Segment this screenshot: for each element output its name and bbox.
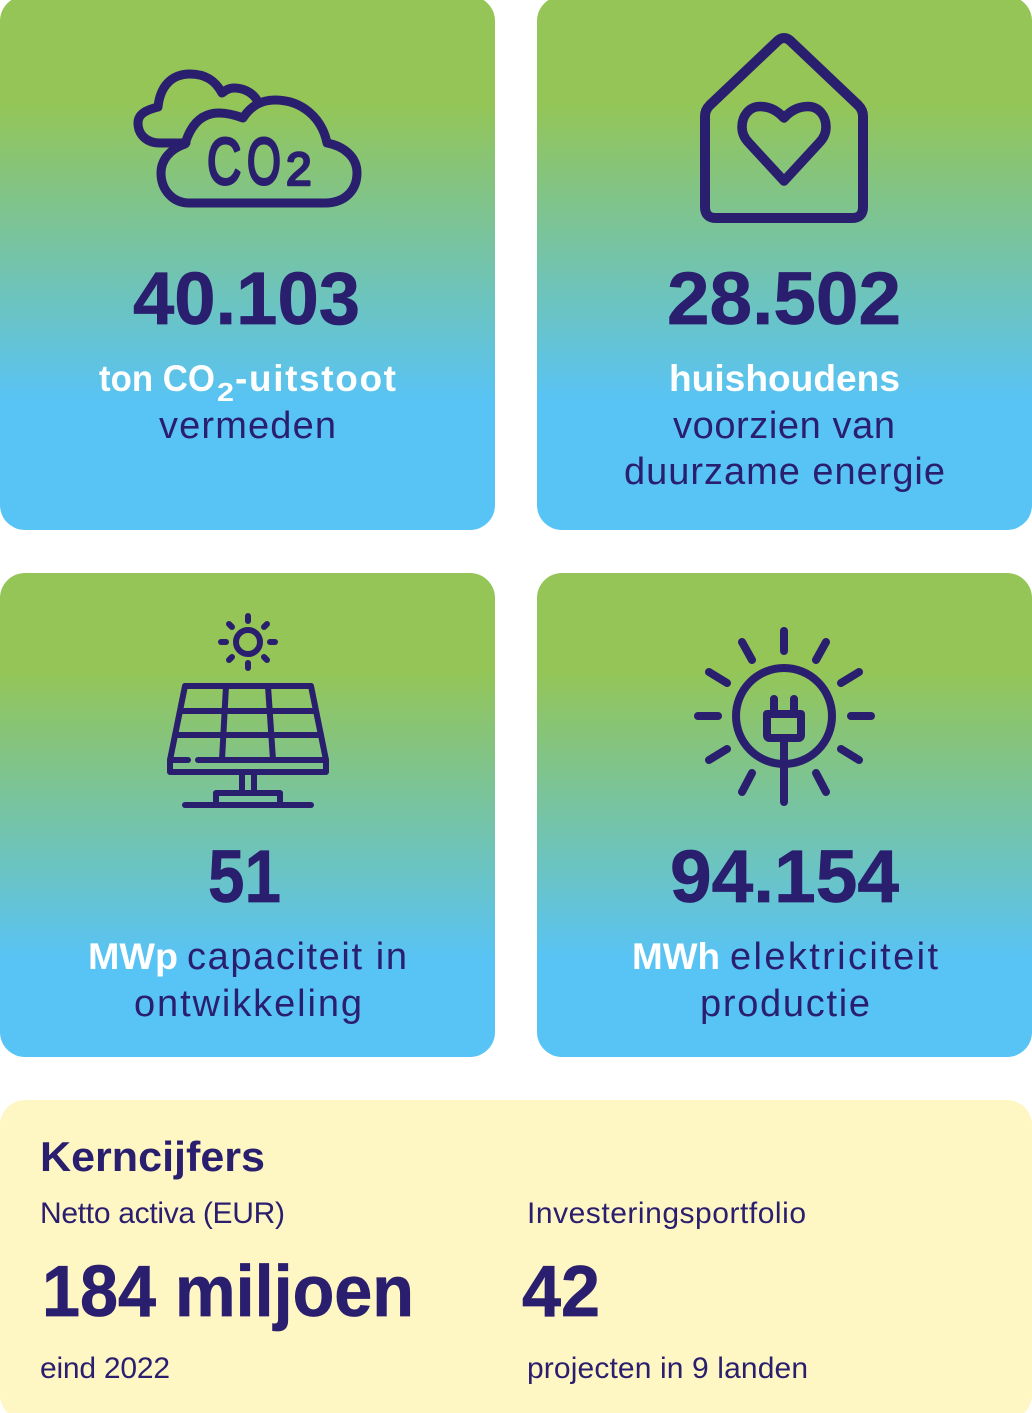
label: MWp capaciteit in ontwikkeling: capaciteit in — [187, 936, 407, 978]
label: MWp capaciteit in ontwikkeling: MWp — [88, 936, 178, 977]
stat: investment portfolio: Investeringsportfolio — [527, 1197, 806, 1230]
label: huishoudens voorzien van duurzame energie: duurzame energie — [624, 451, 945, 493]
icon: CO2 clouds — [138, 74, 357, 203]
label: MWp capaciteit in ontwikkeling: ontwikkeling — [134, 983, 362, 1025]
label: ton CO2-uitstoot vermeden: ton CO — [99, 358, 215, 399]
label: MWp capaciteit in ontwikkeling — [88, 936, 407, 1025]
label: ton CO2-uitstoot vermeden: -uitstoot — [235, 358, 396, 399]
panel: households — [537, 0, 1032, 530]
icon: house with heart — [705, 38, 863, 218]
number: 40.103: 40.103 — [133, 257, 360, 340]
label: MWh elektriciteit productie: productie — [700, 983, 870, 1025]
label: huishoudens voorzien van duurzame energie: huishoudens — [669, 358, 900, 399]
stat: investment portfolio: 42 — [522, 1252, 600, 1332]
number: 28.502: 28.502 — [667, 257, 901, 340]
stat: net assets: Netto activa (EUR) — [40, 1197, 285, 1230]
icon: CO2 clouds: C — [207, 125, 241, 199]
stat: investment portfolio — [522, 1197, 808, 1385]
label: ton CO2-uitstoot vermeden: 2 — [217, 377, 234, 407]
panel: electricity production — [537, 573, 1032, 1057]
label: ton CO2-uitstoot vermeden: vermeden — [159, 405, 336, 447]
label: MWh elektriciteit productie: MWh — [632, 936, 720, 977]
label: ton CO2-uitstoot vermeden — [99, 358, 396, 447]
label: huishoudens voorzien van duurzame energie: voorzien van — [673, 405, 895, 447]
label: huishoudens voorzien van duurzame energie — [624, 358, 945, 493]
icon: solar panel with sun — [170, 616, 326, 805]
icon: sun with plug — [698, 631, 871, 802]
stat: net assets — [40, 1197, 414, 1385]
panel: Kerncijfers — [0, 1100, 1032, 1413]
stat: net assets: 184 miljoen — [42, 1252, 414, 1332]
label: MWh elektriciteit productie: elektriciteit — [730, 936, 938, 978]
heading: Kerncijfers: Kerncijfers — [40, 1133, 265, 1180]
label: MWh elektriciteit productie — [632, 936, 938, 1025]
stat: net assets: eind 2022 — [40, 1352, 170, 1385]
number: 51: 51 — [208, 835, 281, 918]
panel: solar capacity — [0, 573, 495, 1057]
icon: CO2 clouds: 2 — [286, 143, 312, 195]
icon: CO2 clouds: O — [247, 124, 281, 198]
number: 94.154: 94.154 — [670, 835, 899, 918]
panel: CO2 avoided — [0, 0, 495, 530]
stat: investment portfolio: projecten in 9 landen — [527, 1352, 808, 1385]
